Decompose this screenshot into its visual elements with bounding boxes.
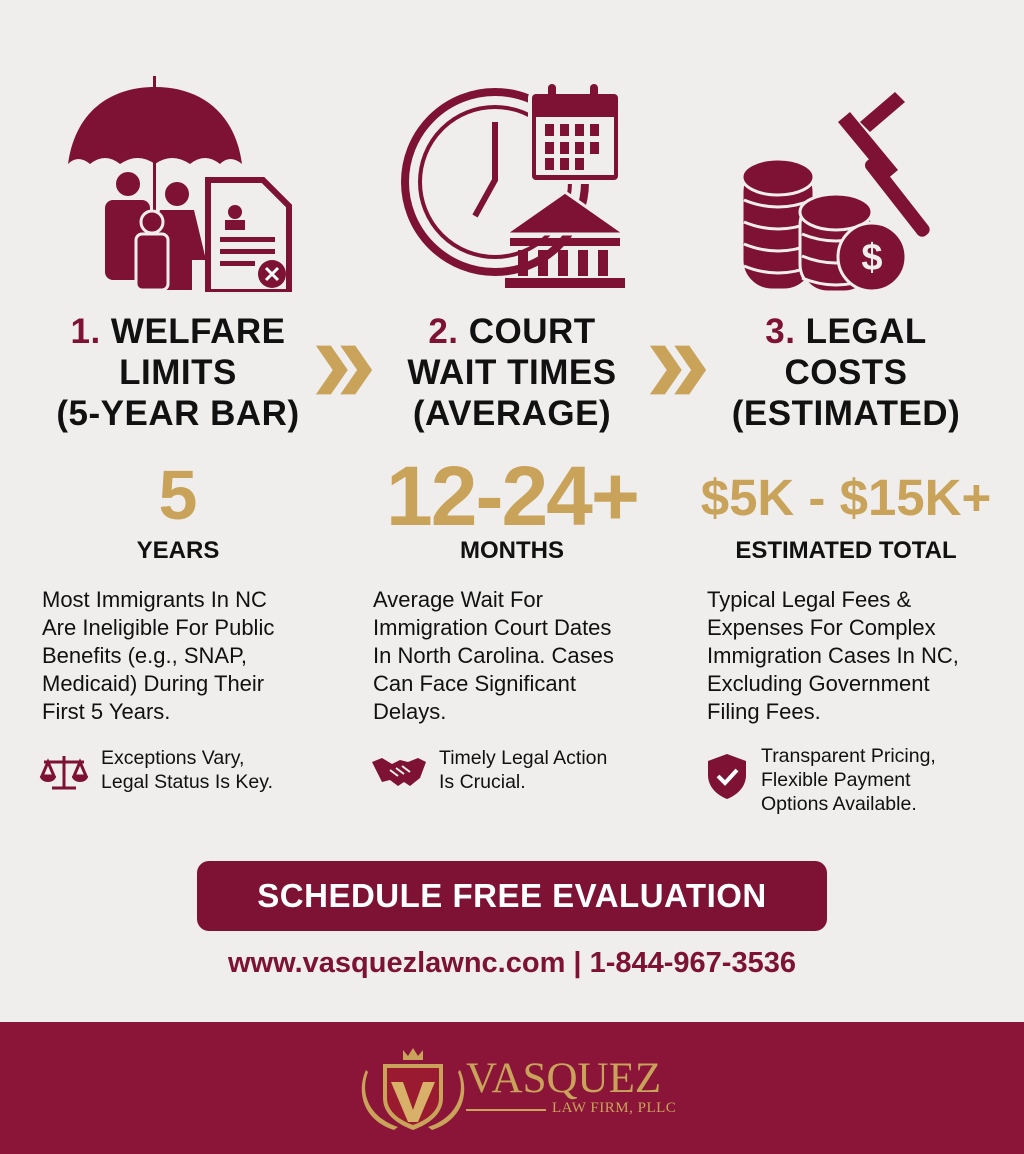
heading 2: (AVERAGE) [413,394,611,433]
label 3: ESTIMATED TOTAL [735,537,957,564]
note 3: Transparent Pricing, [761,745,936,767]
note 1: Legal Status Is Key. [101,771,273,793]
logo: VASQUEZ [466,1055,661,1102]
icon: umbrella family document [68,76,292,292]
stat 2: 12-24+ [386,449,638,543]
button: schedule: SCHEDULE FREE EVALUATION [257,877,767,914]
contact line: www.vasquezlawnc.com | 1-844-967-3536 [228,947,796,979]
heading 3 [732,312,960,433]
heading 1 [56,312,300,433]
icon: shield check [708,754,746,799]
note 2: Timely Legal Action [439,747,607,769]
body 2: Average Wait For [373,587,543,612]
heading 2: 2. COURT [428,312,596,351]
heading 3: 3. LEGAL [765,312,927,351]
note 2 [372,747,607,793]
body 3: Typical Legal Fees & [707,587,911,612]
body 3: Filing Fees. [707,699,821,724]
body 3: Excluding Government [707,671,930,696]
note 3: Flexible Payment [761,769,911,791]
heading 2 [407,312,617,433]
stat 1: 5 [159,456,197,534]
body 2: Can Face Significant [373,671,576,696]
heading 1: (5-YEAR BAR) [56,394,300,433]
body 1: Medicaid) During Their [42,671,264,696]
label 1: YEARS [137,537,219,564]
note 3: Options Available. [761,793,917,815]
note 1: Exceptions Vary, [101,747,244,769]
footer band [0,1022,1024,1154]
logo [362,1048,676,1130]
heading 2: WAIT TIMES [407,353,617,392]
note 1 [40,747,273,793]
icon: coins gavel [744,92,930,290]
body 2: In North Carolina. Cases [373,643,614,668]
heading 3: (ESTIMATED) [732,394,960,433]
body 2: Immigration Court Dates [373,615,611,640]
icon: crest [362,1048,464,1130]
label 2: MONTHS [460,537,564,564]
button: schedule [197,861,827,931]
body 1: Most Immigrants In NC [42,587,267,612]
heading 3: COSTS [784,353,908,392]
body 2 [373,587,614,724]
body 3 [707,587,959,724]
icon: handshake [372,758,426,786]
body 1 [42,587,274,724]
body 3: Immigration Cases In NC, [707,643,959,668]
note 3 [708,745,936,815]
stat 3: $5K - $15K+ [701,469,991,526]
note 2: Is Crucial. [439,771,526,793]
logo: LAW FIRM, PLLC [552,1100,676,1116]
heading 1: LIMITS [119,353,237,392]
icon: clock calendar courthouse [401,84,625,288]
icon: coins gavel: $ [861,237,883,279]
icon: scales [40,756,88,790]
body 3: Expenses For Complex [707,615,936,640]
arrow 2 [650,346,706,394]
body 1: Benefits (e.g., SNAP, [42,643,247,668]
arrow 1 [316,346,372,394]
body 2: Delays. [373,699,446,724]
body 1: Are Ineligible For Public [42,615,274,640]
heading 1: 1. WELFARE [70,312,286,351]
body 1: First 5 Years. [42,699,170,724]
